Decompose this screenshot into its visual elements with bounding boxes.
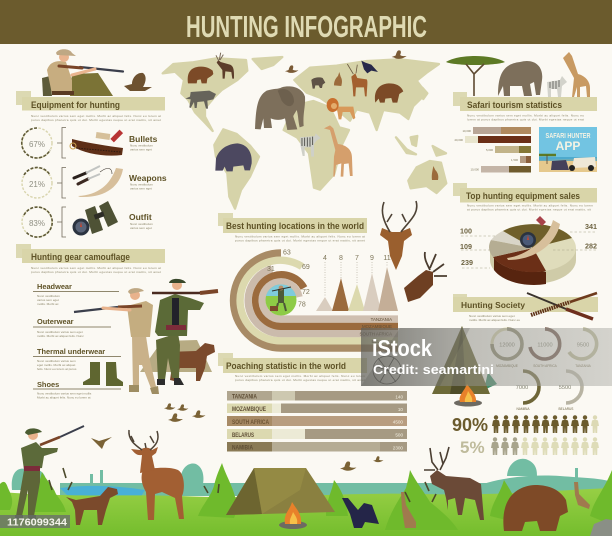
- headwear: Nunc vestibulum: [37, 294, 60, 298]
- image id: 1176099344: [7, 516, 67, 528]
- description: Nunc vestibulum varius sem eget mollis. Morbi ac aliquet felis. Nunc eu lorem at: [31, 114, 161, 118]
- thermal underwear: [33, 347, 121, 371]
- buffalo: [185, 91, 216, 109]
- 3D pie chart: [489, 216, 576, 285]
- description: Nunc vestibulum varius sem eget mollis. Morbi ac aliquet felis. Nunc eu: [467, 114, 584, 118]
- bar: South Africa: 4500: [393, 420, 403, 424]
- ring: 5500: [559, 371, 582, 411]
- country labels: MOZAMBIQUE: [362, 324, 392, 329]
- radial chart values: 72: [302, 289, 310, 296]
- headwear: varius sem eget: [37, 298, 59, 302]
- icon: knife and horn: [74, 166, 123, 197]
- section heading: [218, 353, 367, 373]
- ring: 12000: 12000: [499, 342, 515, 348]
- description: purus dapibus pharetra quis ut dui. Morbi egestas neque ut erat mattis, sit amet: [235, 238, 365, 242]
- bar: South Africa: [227, 416, 407, 426]
- shoes: Shoes: [37, 380, 59, 389]
- stat: 21 percent weapons: [22, 167, 66, 198]
- brown bear: [503, 485, 568, 531]
- ring: 11000: SOUTH AFRICA: [533, 364, 558, 368]
- description: purus dapibus pharetra quis ut dui. Morbi egestas neque ut erat mattis, sit amet: [31, 270, 161, 274]
- bar: Namibia: NAMIBIA: [232, 444, 253, 452]
- panel: equipment for hunting: [16, 49, 167, 237]
- country labels: TANZANIA: [371, 317, 392, 322]
- weapons label: [129, 173, 167, 190]
- thermal underwear: eget mollis. Morbi ac aliquet: [37, 363, 75, 367]
- deer asia: [347, 64, 367, 96]
- section heading: [453, 294, 598, 312]
- stat: 90 percent: 90%: [452, 415, 488, 435]
- radial chart values: 63: [283, 250, 291, 256]
- outerwear: mollis. Morbi ac aliquet felis. Nunc: [37, 334, 84, 338]
- hare: [401, 492, 416, 528]
- flying birds: [340, 456, 384, 471]
- ring: 5500: BELARUS: [559, 407, 573, 411]
- bar chart: [454, 127, 531, 172]
- watermark emblem: [373, 356, 401, 384]
- world map with animals: [163, 50, 446, 209]
- moose: [424, 447, 484, 520]
- bullets label: Bullets: [129, 134, 158, 144]
- bar: Mozambique: [227, 404, 407, 413]
- ring: 7000: [516, 371, 539, 411]
- watermark facets: [361, 328, 470, 386]
- grouse: [361, 61, 378, 73]
- shoes: [33, 380, 121, 400]
- hunting landscape scene: [0, 426, 612, 536]
- stat: 5 percent: 5%: [460, 438, 485, 457]
- hare australia: [432, 166, 438, 180]
- stat: 5 percent: [460, 437, 599, 457]
- mountain peaks chart: 4: [323, 255, 327, 262]
- bar chart: 5,000: [486, 148, 493, 152]
- flying duck: [124, 73, 152, 91]
- mountain peaks chart: 11: [383, 255, 391, 262]
- bar: Tanzania: 140: [395, 394, 403, 400]
- outerwear: Nunc vestibulum varius sem eget: [37, 330, 83, 334]
- bar chart: 1,500: [511, 158, 518, 162]
- panel: safari tourism statistics: [446, 52, 597, 172]
- section heading: Top hunting equipment sales: [466, 191, 580, 202]
- hunter in green: [152, 279, 218, 385]
- panel: poaching statistic: [218, 353, 407, 452]
- safari hunter app card: [539, 127, 597, 172]
- rock: [590, 519, 612, 536]
- hunter with tent: [42, 49, 123, 96]
- red deer: [129, 430, 184, 520]
- bear asia: [375, 83, 403, 103]
- pie values: 282: [585, 242, 597, 250]
- pie leader lines: [461, 232, 597, 268]
- title: HUNTING INFOGRAPHIC: [186, 9, 427, 44]
- panel: hunting society: [432, 293, 599, 457]
- bar: Belarus: 500: [395, 432, 403, 438]
- outfit label: varius sem eget: [130, 226, 152, 230]
- shoes: Morbi ac aliquet felis. Nunc eu lorem at: [37, 396, 91, 400]
- ring: 12000: MOZAMBIQUE: [496, 364, 518, 368]
- thermal underwear: felis. Nunc eu lorem at purus: [37, 367, 77, 371]
- hunters with dog and tent: [74, 279, 218, 394]
- country labels: SOUTH AFRICA: [360, 332, 392, 336]
- zebra: [300, 133, 321, 157]
- bar chart: 10,000: [470, 168, 479, 172]
- thermal underwear: Nunc vestibulum varius sem: [37, 359, 76, 363]
- stat: 83 percent outfit: 83%: [29, 219, 45, 228]
- radial chart values: 31: [267, 266, 275, 273]
- outfit label: Outfit: [129, 212, 152, 222]
- meadow: [0, 488, 612, 536]
- outfit label: [129, 212, 153, 230]
- bar: Mozambique: MOZAMBIQUE: [232, 406, 266, 413]
- mountain peaks chart: 9: [370, 255, 374, 262]
- section heading: Hunting Society: [461, 300, 525, 310]
- pie values: 100: [460, 226, 472, 236]
- image id tag: [0, 515, 70, 528]
- ring: 7000: 7000: [516, 385, 528, 391]
- stat: 90 percent: [452, 415, 599, 435]
- ring: 5500: 5500: [559, 385, 571, 391]
- hunting dog: [66, 487, 118, 525]
- description: Nunc vestibulum varius sem eget mollis. Morbi ac aliquet felis. Nunc eu lorem: [467, 204, 593, 208]
- section heading: [218, 213, 367, 233]
- bear north america: [188, 67, 213, 83]
- country labels: BELARUS: [372, 339, 392, 344]
- section heading: Safari tourism statistics: [467, 100, 562, 110]
- bar: Tanzania: [227, 391, 407, 400]
- ring: 12000: [492, 329, 522, 368]
- description: purus dapibus pharetra quis ut dui. Morbi egestas neque ut erat mattis, sit amet: [31, 118, 161, 122]
- icon: ammo belt: [70, 130, 123, 156]
- ring: 11000: 11000: [537, 342, 553, 348]
- bullets label: varius sem eget: [130, 148, 152, 152]
- bar: Tanzania: TANZANIA: [232, 394, 257, 400]
- campfire: [279, 502, 307, 529]
- bar: Namibia: [227, 442, 407, 452]
- hunter aiming: [15, 426, 84, 519]
- icon: binoculars and compass: [72, 201, 118, 236]
- weapons label: varius sem eget: [130, 186, 152, 190]
- camping tent: [226, 468, 335, 515]
- outerwear: [33, 317, 111, 338]
- stat: 83 percent outfit: [22, 207, 66, 237]
- description: purus dapibus pharetra quis ut dui. Morbi egestas neque ut erat mattis, sit amet: [235, 378, 365, 382]
- section heading: [453, 183, 597, 202]
- headwear: mollis. Morbi ac: [37, 302, 59, 306]
- deer head: [380, 201, 417, 270]
- stat: 67 percent bullets: [22, 128, 66, 158]
- small bird map: [285, 65, 298, 73]
- panel: hunting gear camouflage: [16, 244, 218, 422]
- bar chart: 10,000: [462, 129, 471, 133]
- watermark band: [361, 328, 612, 386]
- description: Nunc vestibulum varius sem eget mollis. Morbi ac aliquet felis. Nunc eu lorem at: [31, 266, 161, 270]
- ring: 9500: TANZANIA: [575, 364, 592, 368]
- description: Nunc vestibulum varius sem eget mollis. Morbi ac aliquet felis. Nunc eu lorem: [235, 374, 365, 378]
- stat: 21 percent weapons: 21%: [29, 180, 45, 189]
- continents: [163, 57, 446, 209]
- watermark credit: Credit: seamartini: [373, 362, 494, 377]
- thermal underwear: Thermal underwear: [37, 347, 105, 356]
- safari hunter app card: APP: [556, 139, 580, 153]
- hare map: [334, 72, 342, 86]
- description: Nunc vestibulum varius sem eget mollis. Morbi ac aliquet felis. Nunc eu lorem at: [235, 234, 365, 238]
- flying duck: [91, 437, 112, 449]
- section heading: [16, 244, 165, 263]
- safari animals: [446, 52, 590, 97]
- pie values: 341: [585, 222, 597, 231]
- hunter in scope circle: [266, 284, 296, 316]
- bullets label: [129, 134, 158, 152]
- hippo: [215, 143, 252, 171]
- section heading: [453, 92, 597, 111]
- boar: [311, 77, 325, 89]
- bulrushes: [49, 468, 436, 502]
- country labels: [360, 317, 392, 351]
- ring: 9500: [569, 329, 597, 368]
- panel: best hunting locations: [218, 201, 447, 351]
- tent and fire: [432, 326, 497, 406]
- weapons label: Weapons: [129, 173, 167, 183]
- ring: 11000: [530, 329, 560, 368]
- section heading: Best hunting locations in the world: [226, 221, 364, 231]
- pie values: [460, 222, 597, 267]
- watermark logo: iStock: [372, 335, 432, 361]
- mountain peaks chart: [316, 255, 398, 311]
- pie values: 109: [460, 242, 472, 251]
- pie values: 239: [461, 258, 473, 267]
- icon: crossed rifles: [527, 293, 597, 319]
- section heading: Hunting gear camouflage: [31, 252, 130, 262]
- bar: Belarus: [227, 429, 407, 439]
- description: at purus dapibus pharetra quis ut dui. Morbi egestas neque ut erat mattis, sit: [467, 208, 591, 212]
- outerwear: Outerwear: [37, 317, 74, 326]
- bar: Namibia: 2300: [393, 446, 403, 450]
- lion: [327, 98, 355, 119]
- black grouse: [342, 498, 379, 528]
- bullets label: Nunc vestibulum: [130, 144, 153, 148]
- bushes: [0, 463, 612, 530]
- giraffe: [324, 125, 353, 177]
- safari hunter app card: SAFARI HUNTER: [546, 133, 590, 140]
- headwear: Headwear: [37, 282, 72, 291]
- elephant: [255, 86, 305, 130]
- description: mollis. Morbi ac aliquet felis. Nunc eu: [469, 318, 520, 322]
- country labels: NAMIBIA: [374, 346, 392, 351]
- bar chart: 20,000: [454, 138, 463, 142]
- mountain peaks chart: 7: [355, 255, 359, 262]
- flying ducks small: [164, 403, 206, 422]
- description: Nunc vestibulum varius sem eget: [469, 314, 515, 318]
- moose north america: [216, 53, 234, 79]
- outfit label: Nunc vestibulum: [130, 222, 153, 226]
- headwear: [33, 282, 119, 306]
- dog: [166, 343, 215, 381]
- section heading: Poaching statistic in the world: [226, 361, 346, 371]
- section heading: Equipment for hunting: [31, 100, 120, 110]
- mountain peaks chart: 8: [339, 255, 343, 262]
- bar: South Africa: SOUTH AFRICA: [232, 419, 269, 426]
- header band with title: [0, 0, 612, 44]
- radial chart values: [267, 250, 310, 308]
- shoes: Nunc vestibulum varius sem eget mollis: [37, 392, 92, 396]
- hare right: [574, 482, 590, 509]
- duck north: [392, 50, 407, 59]
- section heading: [16, 91, 165, 110]
- moose head: [404, 252, 447, 302]
- far trees and hills: [12, 459, 612, 498]
- radial bar chart: [234, 253, 398, 348]
- bar: Belarus: BELARUS: [232, 432, 254, 439]
- bar: Mozambique: 10: [398, 407, 403, 412]
- hunter in tan: [74, 288, 159, 394]
- icon: rubber boots: [83, 362, 123, 386]
- weapons label: Nunc vestibulum: [130, 182, 153, 186]
- ring: 7000: NAMIBIA: [516, 407, 530, 411]
- radial chart values: 78: [298, 302, 306, 308]
- horn and compass on pie: [507, 220, 560, 260]
- radial chart values: 69: [302, 264, 310, 271]
- panel: top hunting equipment sales: [453, 183, 597, 285]
- stat: 67 percent bullets: 67%: [29, 140, 45, 149]
- description: lorem at purus dapibus pharetra quis ut dui. Morbi egestas neque ut erat: [467, 118, 584, 122]
- ring: 9500: 9500: [577, 342, 589, 348]
